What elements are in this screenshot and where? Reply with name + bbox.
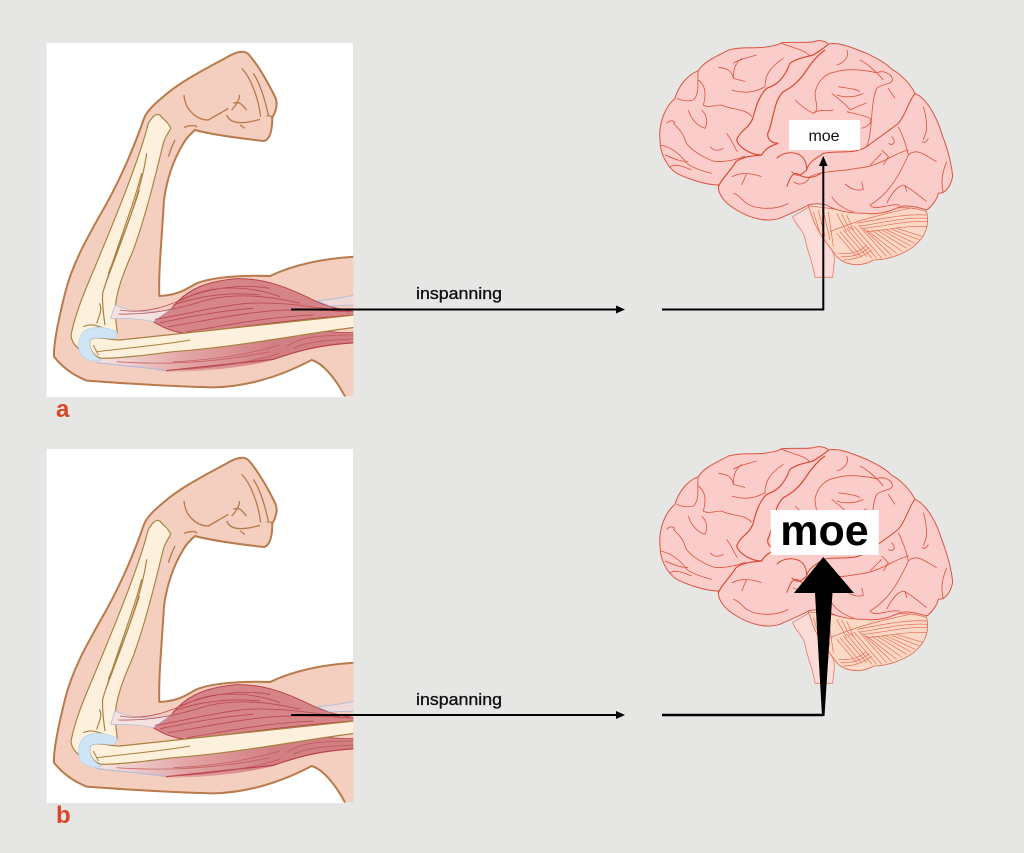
arrow: thick signal to brain: [662, 557, 854, 716]
arrow: muscle to spinal cord b: [291, 711, 625, 719]
label: a: a: [56, 396, 70, 423]
label: inspanning b: inspanning: [416, 690, 502, 709]
panel a white background: [47, 43, 353, 397]
illustration: brain b: [660, 447, 953, 683]
label: inspanning a: inspanning: [416, 284, 502, 303]
illustration: brain a: [660, 41, 953, 277]
panel: arm b: [47, 449, 355, 804]
illustration: flexed arm b: [54, 458, 355, 804]
label box: moe small: moe: [808, 128, 840, 145]
illustration: flexed arm a: [54, 52, 355, 398]
label box: moe large: moe: [780, 507, 869, 555]
label: b: b: [56, 802, 71, 829]
panel b white background: [47, 449, 353, 803]
arrow: thin signal to brain: [662, 156, 828, 310]
panel: arm a: [47, 43, 355, 398]
arrow: muscle to spinal cord a: [291, 306, 625, 314]
label box: moe small: [789, 120, 860, 150]
